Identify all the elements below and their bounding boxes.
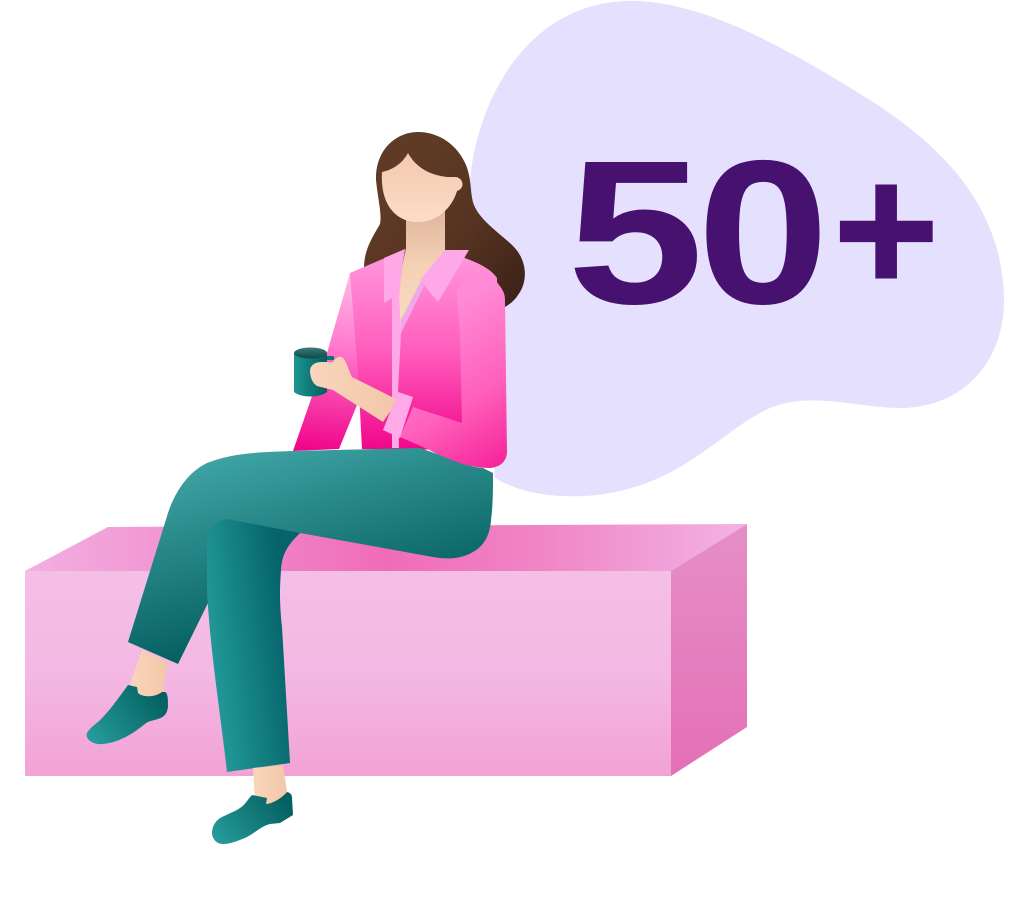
- block front face: [25, 571, 671, 776]
- number: 50+: [567, 117, 939, 347]
- block top face: [25, 524, 747, 571]
- right collar: [420, 250, 469, 302]
- mug: [294, 348, 334, 396]
- left collar: [384, 249, 405, 303]
- block side face: [671, 524, 747, 776]
- number: 50+: 0: [697, 118, 829, 347]
- pink block: [25, 524, 747, 776]
- number: 50+: 5: [567, 117, 704, 346]
- back foot skin: [130, 650, 168, 700]
- back shoe: [87, 685, 168, 744]
- front shoe: [212, 792, 293, 844]
- cuff: [383, 392, 413, 438]
- mug rim: [294, 348, 327, 358]
- mug handle: [325, 356, 334, 360]
- front sleeve: [400, 276, 507, 468]
- hair: [364, 132, 525, 307]
- number: 50+: +: [833, 127, 939, 331]
- leg and thigh: [128, 448, 493, 664]
- front shin: [207, 519, 300, 772]
- back arm: [293, 273, 362, 451]
- speech blob: [470, 1, 1004, 496]
- hand and forearm: [310, 357, 398, 422]
- front foot skin: [253, 765, 287, 808]
- neck and chest: [399, 200, 445, 333]
- torso shirt: [350, 249, 500, 450]
- face: [382, 153, 463, 222]
- woman figure: [87, 132, 525, 844]
- placket: [392, 297, 401, 448]
- mug body: [294, 353, 327, 396]
- collar stripe: [401, 281, 424, 333]
